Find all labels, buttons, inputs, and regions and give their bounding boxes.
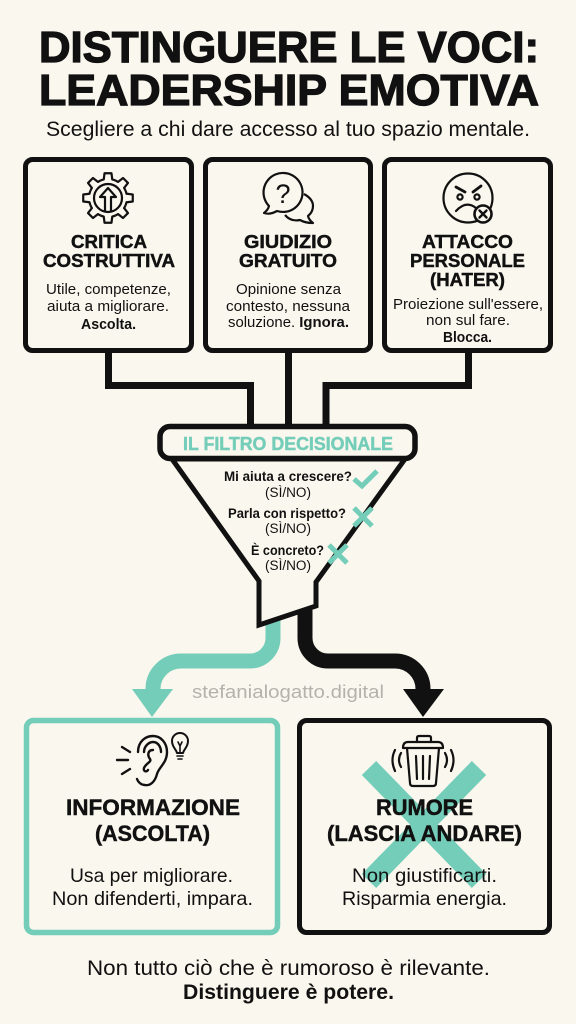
title — [39, 23, 539, 115]
arrow: black to rumore — [305, 610, 444, 717]
footer: Non tutto ciò che è rumoroso è rilevante. — [87, 956, 490, 980]
text: giudizio gratuito description — [226, 281, 351, 331]
heading: informazione: (ASCOLTA) — [95, 821, 210, 846]
icon: angry face — [444, 174, 492, 222]
heading: informazione: INFORMAZIONE — [66, 795, 240, 820]
icon: speech bubbles with question mark — [264, 173, 313, 223]
heading: attacco personale — [410, 232, 525, 290]
panel: critica costruttiva — [26, 160, 192, 350]
funnel heading: IL FILTRO DECISIONALE — [183, 434, 393, 454]
text: attacco personale description: Blocca. — [443, 329, 492, 346]
heading: critica costruttiva: CRITICA — [71, 232, 147, 252]
question 1: (SÌ/NO) — [265, 485, 311, 500]
question 2: Parla con rispetto? — [228, 506, 346, 521]
text: attacco personale description: Proiezione sull'essere, — [393, 296, 543, 313]
icon: speech bubbles with question mark: ? — [275, 179, 291, 209]
funnel body — [172, 459, 405, 625]
panel: attacco personale — [384, 160, 550, 350]
question 3: È concreto? — [251, 543, 324, 558]
title: LEADERSHIP EMOTIVA — [39, 66, 539, 115]
icon: noisy trash can — [392, 736, 454, 786]
text: informazione description: Usa per migliorare. — [70, 865, 233, 887]
heading: attacco personale: (HATER) — [430, 270, 505, 290]
text: giudizio gratuito description: contesto, nessuna — [226, 298, 351, 315]
funnel: il filtro decisionale — [160, 426, 415, 625]
title: DISTINGUERE LE VOCI: — [39, 23, 539, 72]
arrow: teal to informazione — [132, 620, 273, 717]
text: critica costruttiva description: aiuta a migliorare. — [47, 298, 169, 315]
question 1 — [224, 469, 377, 500]
text: rumore description — [342, 865, 507, 910]
text: rumore description: Risparmia energia. — [342, 888, 507, 910]
icon: ear with bulb — [117, 733, 188, 785]
footer — [87, 956, 490, 1004]
subtitle: Scegliere a chi dare accesso al tuo spazio mentale. — [46, 117, 530, 141]
footer: Distinguere è potere. — [183, 980, 394, 1004]
question 2: (SÌ/NO) — [265, 521, 311, 536]
text: attacco personale description: non sul fare. — [426, 312, 510, 329]
watermark: stefanialogatto.digital — [192, 682, 384, 702]
panel: informazione — [26, 720, 278, 932]
panel: rumore — [300, 720, 550, 932]
text: critica costruttiva description: Utile, competenze, — [46, 281, 171, 298]
connectors from cards to filter — [108, 352, 468, 426]
question 2 — [228, 506, 372, 536]
text: informazione description: Non difenderti, impara. — [52, 888, 253, 910]
text: informazione description — [52, 865, 253, 910]
heading: attacco personale: PERSONALE — [410, 251, 525, 271]
heading: giudizio gratuito — [239, 232, 337, 271]
heading: giudizio gratuito: GIUDIZIO — [244, 232, 332, 252]
heading: informazione — [66, 795, 240, 846]
text: attacco personale description — [393, 296, 543, 346]
question 3 — [251, 543, 347, 573]
icon: big teal x — [369, 768, 479, 881]
heading: rumore: RUMORE — [376, 795, 473, 820]
heading: giudizio gratuito: GRATUITO — [239, 251, 337, 271]
heading: rumore: (LASCIA ANDARE) — [327, 821, 522, 846]
panel: giudizio gratuito — [206, 160, 370, 350]
text: giudizio gratuito description: Opinione senza — [236, 281, 342, 298]
question 3: (SÌ/NO) — [265, 558, 311, 573]
text: rumore description: Non giustificarti. — [352, 865, 497, 887]
text: giudizio gratuito description: soluzione. Ignora. — [228, 314, 349, 331]
heading: attacco personale: ATTACCO — [422, 232, 513, 252]
funnel header — [160, 426, 415, 458]
heading: rumore — [327, 795, 522, 846]
text: critica costruttiva description: Ascolta. — [81, 316, 136, 333]
heading: critica costruttiva: COSTRUTTIVA — [43, 251, 175, 271]
icon: gear with up arrow — [83, 173, 133, 223]
heading: critica costruttiva — [43, 232, 175, 271]
text: critica costruttiva description — [46, 281, 171, 333]
question 1: Mi aiuta a crescere? — [224, 469, 352, 484]
